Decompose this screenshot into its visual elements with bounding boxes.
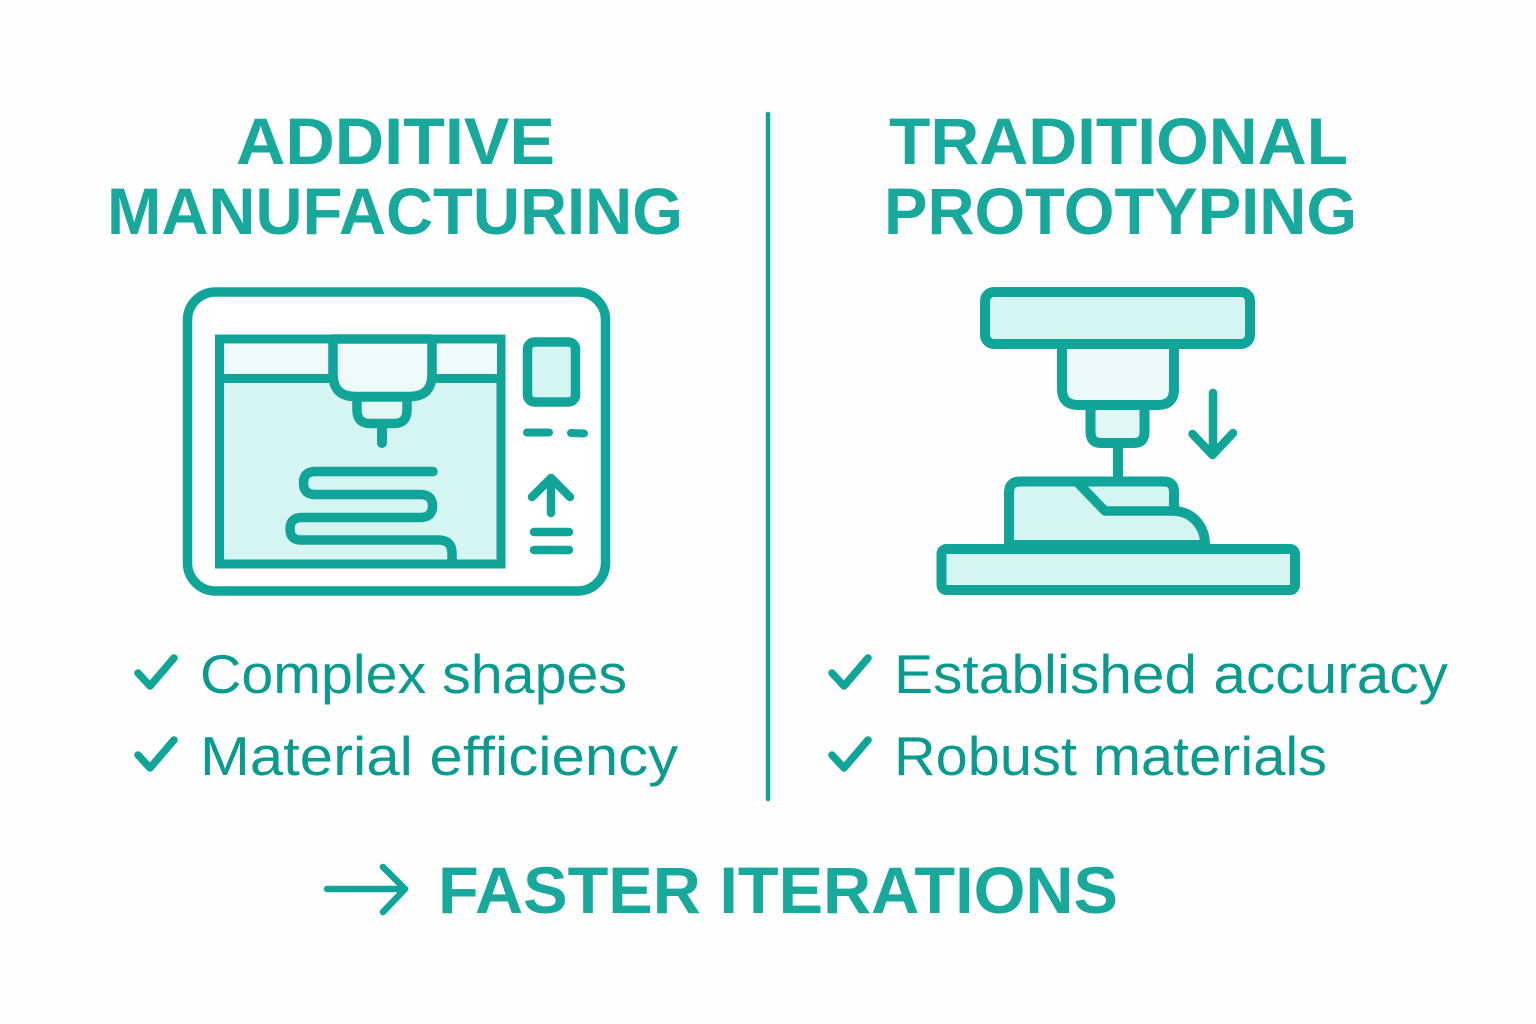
icon: 3D printer: [188, 292, 606, 591]
list: additive benefits: [138, 643, 679, 787]
check icon: [138, 740, 174, 768]
up arrow: [532, 478, 570, 513]
machine head: [985, 292, 1250, 344]
vertical divider: [766, 114, 770, 799]
print head carriage: [333, 339, 432, 396]
indicator dashes: [527, 432, 584, 434]
arrow: conclusion: [327, 867, 405, 912]
icon: milling machine: [942, 292, 1295, 590]
benefit: material efficiency: Material efficiency: [200, 725, 679, 787]
benefit: robust materials: Robust materials: [894, 725, 1327, 787]
heading: traditional prototyping: [884, 104, 1357, 248]
cutting bit: [1113, 445, 1123, 480]
check icon: [138, 658, 174, 686]
benefit: established accuracy: Established accuracy: [894, 643, 1449, 705]
heading: traditional prototyping: TRADITIONAL: [889, 104, 1348, 178]
check icon: [832, 740, 868, 768]
gantry line: [220, 374, 501, 383]
cut groove: [1077, 482, 1174, 511]
machine bed: [942, 549, 1295, 590]
heading: traditional prototyping: PROTOTYPING: [884, 174, 1357, 248]
gantry band: [224, 344, 497, 374]
heading: additive manufacturing: MANUFACTURING: [107, 174, 683, 248]
down arrow: [1192, 393, 1233, 455]
nozzle: [357, 397, 407, 424]
benefit: complex shapes: Complex shapes: [200, 643, 627, 705]
printer outer casing: [188, 292, 606, 591]
printed serpentine layers: [290, 472, 452, 562]
list: traditional benefits: [832, 643, 1449, 787]
tool holder: [1090, 405, 1144, 443]
control screen: [528, 342, 576, 402]
control lines: [534, 532, 569, 550]
heading: additive manufacturing: [107, 104, 683, 248]
workpiece: [1009, 482, 1205, 545]
heading: additive manufacturing: ADDITIVE: [236, 104, 555, 178]
spindle housing: [1062, 344, 1174, 405]
nozzle tip: [377, 424, 387, 443]
build chamber: [220, 339, 501, 564]
check icon: [832, 658, 868, 686]
conclusion text: FASTER ITERATIONS: [438, 853, 1118, 927]
